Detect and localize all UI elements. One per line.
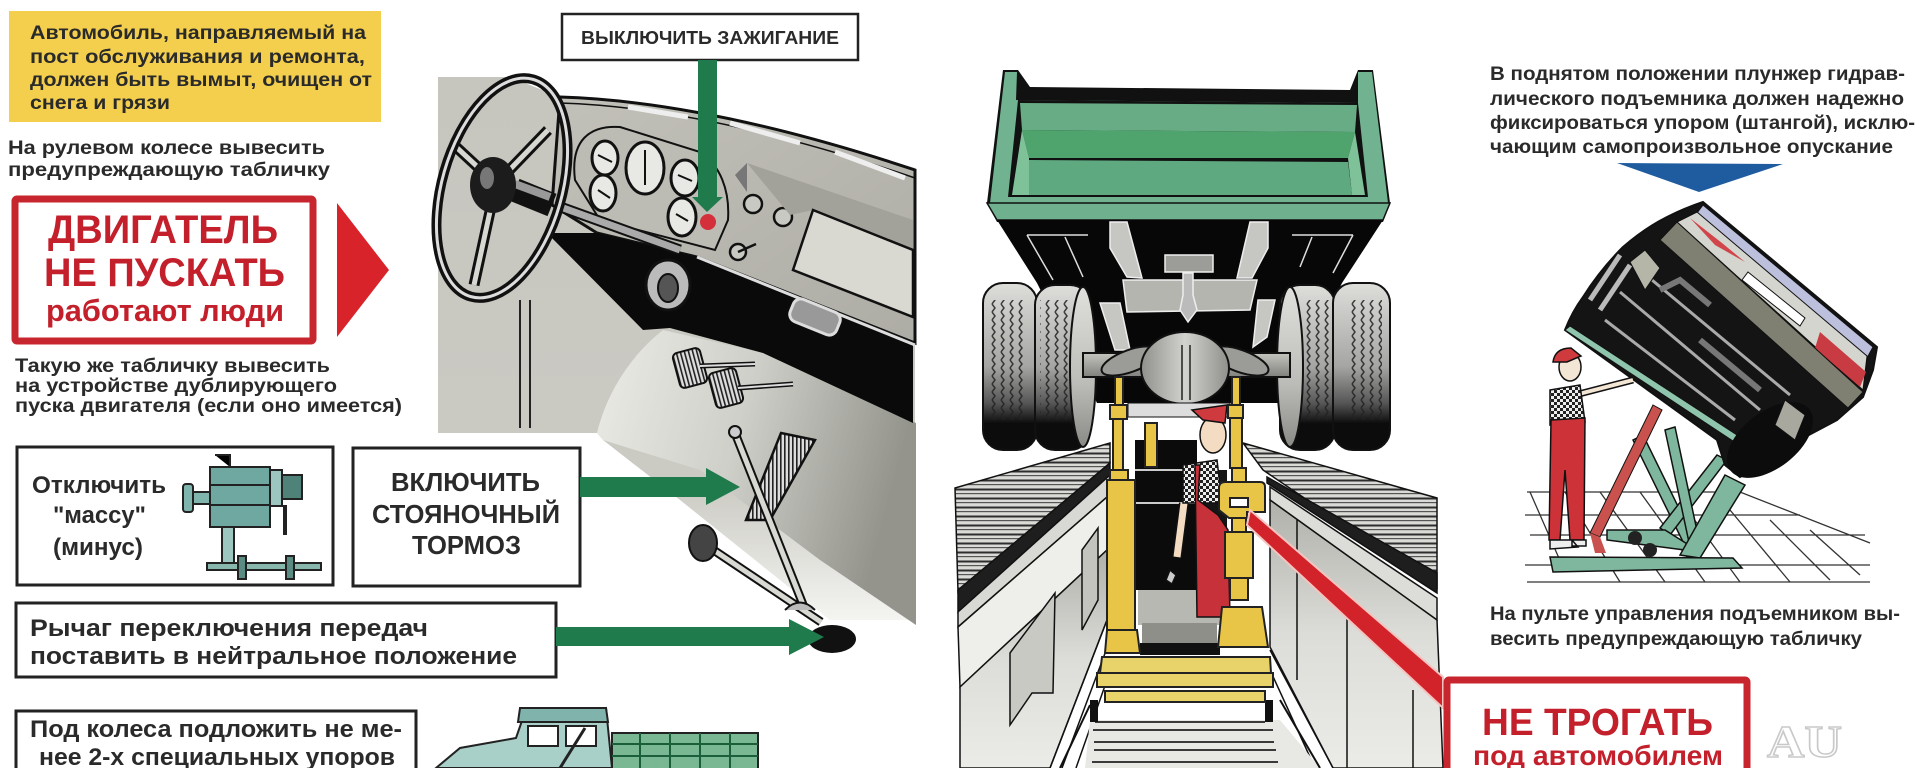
floor grid (1525, 492, 1870, 582)
truck tipper body (987, 70, 1390, 222)
tyres (983, 283, 1390, 450)
warning sign: do not start engine: работают люди (46, 293, 284, 328)
underside (1605, 270, 1790, 420)
panel: disconnect ground (17, 447, 333, 585)
car body (1565, 202, 1877, 477)
steering wheel (413, 63, 591, 313)
callout line: red pointer (1247, 510, 1443, 708)
text: control panel note: весить предупреждающую табличку (1490, 629, 1862, 650)
illustration: car on scissor lift (1525, 202, 1877, 582)
warning sign: do not start engine: ДВИГАТЕЛЬ (48, 208, 278, 252)
callout: switch off ignition: ВЫКЛЮЧИТЬ ЗАЖИГАНИЕ (581, 28, 839, 48)
text: steering wheel note: На рулевом колесе вывесить (8, 138, 325, 159)
text: duplicate start device note: на устройстве дублирующего (15, 376, 337, 397)
pit centre (1135, 440, 1197, 590)
panel: gear lever (16, 603, 556, 677)
text: duplicate start device note: пуска двигателя (если оно имеется) (15, 396, 402, 417)
illustration: dump truck on inspection pit (955, 70, 1443, 768)
illustration: truck cab dashboard (413, 63, 916, 653)
warning sign: do not start engine: НЕ ПУСКАТЬ (44, 251, 285, 295)
text: plunger note: чающим самопроизвольное опускание (1490, 137, 1893, 158)
illustration: truck with chocks (436, 708, 758, 768)
panel: washed car note: Автомобиль, направляемый на (30, 23, 366, 44)
arrow: to gear lever (556, 619, 824, 655)
arrow: blue triangle (1617, 163, 1783, 192)
pit left platform (955, 443, 1114, 768)
icon: ignition lamp (700, 214, 716, 230)
pit right platform (1243, 443, 1443, 768)
icon: battery switch (183, 455, 321, 579)
panel: parking brake: ВКЛЮЧИТЬ (391, 467, 540, 497)
pedals (672, 347, 708, 389)
text: control panel note: На пульте управления подъемником вы- (1490, 604, 1900, 625)
warning sign: do not start engine (15, 199, 313, 341)
panel: parking brake: СТОЯНОЧНЫЙ (372, 499, 560, 529)
warning sign: do not touch: НЕ ТРОГАТЬ (1482, 702, 1713, 744)
axle and differential (1083, 353, 1290, 377)
panel: gear lever: Рычаг переключения передач (30, 615, 428, 642)
text: plunger note: В поднятом положении плунжер гидрав- (1490, 64, 1905, 85)
panel: wheel chocks: Под колеса подложить не ме- (30, 716, 402, 743)
panel: parking brake: ТОРМОЗ (412, 530, 521, 560)
callout: switch off ignition (562, 14, 858, 60)
arrow: to ignition switch (692, 60, 723, 212)
panel: gear lever: поставить в нейтральное положение (30, 643, 517, 670)
steps (1097, 657, 1273, 702)
lift frame (1550, 427, 1745, 572)
panel: washed car note: должен быть вымыт, очищен от (30, 70, 372, 91)
right jack (1218, 405, 1268, 647)
panel: disconnect ground: (минус) (53, 534, 143, 561)
lift operator (1549, 348, 1633, 549)
support rod (1590, 405, 1662, 537)
gauges (590, 141, 699, 236)
text: plunger note: лического подъемника должен надежно (1490, 89, 1904, 110)
hand brake and gear levers (746, 433, 815, 520)
panel: parking brake (353, 448, 580, 586)
text: duplicate start device note (15, 356, 402, 417)
text: plunger note: фиксироваться упором (штангой), исклю- (1490, 113, 1915, 134)
watermark: AU (1767, 716, 1842, 767)
panel: wheel chocks (16, 711, 416, 768)
panel: washed car note: пост обслуживания и ремонта, (30, 47, 365, 68)
text: plunger note (1490, 64, 1915, 158)
rear wheel (1713, 387, 1827, 493)
text: steering wheel note (8, 138, 331, 181)
text: control panel note (1490, 604, 1900, 650)
arrow: red triangle (337, 203, 389, 337)
panel: disconnect ground: "массу" (53, 502, 146, 529)
pit floor (1085, 720, 1320, 768)
mechanic (1166, 405, 1230, 617)
truck undercarriage (997, 220, 1383, 403)
warning sign: do not touch (1447, 680, 1747, 768)
panel: washed car note: снега и грязи (30, 93, 170, 114)
panel: disconnect ground: Отключить (32, 472, 166, 499)
text: steering wheel note: предупреждающую табличку (8, 160, 331, 181)
yellow jack posts (1105, 377, 1240, 653)
panel: washed car note (9, 11, 381, 122)
arrow: to parking brake (580, 468, 740, 505)
text: duplicate start device note: Такую же табличку вывесить (15, 356, 330, 377)
